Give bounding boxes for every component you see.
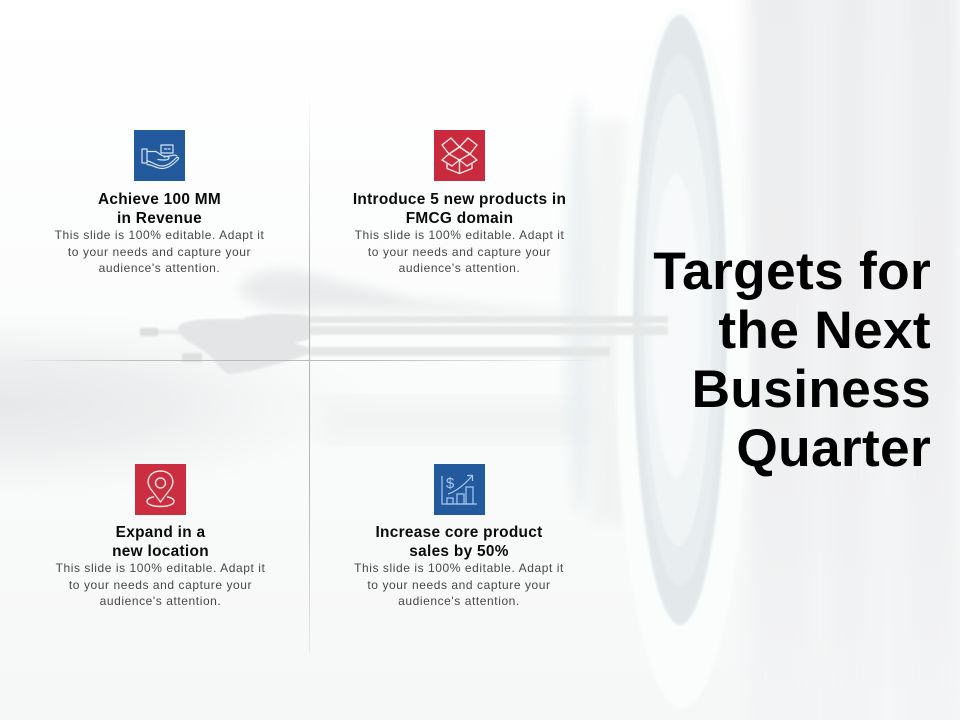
block: new location: This slide is 100% editable. Adapt it <box>56 561 265 575</box>
icon: open box <box>434 130 485 181</box>
title: Targets for <box>653 242 931 301</box>
horizontal divider <box>15 360 605 361</box>
icon: hand holding money <box>134 130 185 181</box>
block: achieve revenue: Achieve 100 MM <box>98 191 221 208</box>
block: new products: FMCG domain <box>406 210 513 227</box>
block: core product sales: Increase core product <box>375 524 543 541</box>
block: new products: to your needs and capture your <box>368 244 551 258</box>
block: new location: audience's attention. <box>100 594 221 608</box>
title: Quarter <box>736 419 931 478</box>
block: core product sales <box>354 524 564 608</box>
block: new products: This slide is 100% editable. Adapt it <box>355 228 564 242</box>
block: achieve revenue: in Revenue <box>117 210 202 227</box>
block: new products: Introduce 5 new products in <box>353 191 566 208</box>
block: core product sales: This slide is 100% editable. Adapt it <box>354 561 564 575</box>
block: core product sales: to your needs and capture your <box>367 578 551 592</box>
block: core product sales: audience's attention. <box>398 594 520 608</box>
right wall <box>748 0 960 720</box>
target rings <box>633 15 727 625</box>
block: achieve revenue: This slide is 100% editable. Adapt it <box>55 228 264 242</box>
block: achieve revenue <box>54 191 264 275</box>
title: the Next <box>718 301 931 360</box>
background target ghost <box>592 120 626 525</box>
block: new products: audience's attention. <box>399 261 520 275</box>
block: new location: to your needs and capture your <box>69 578 252 592</box>
block: achieve revenue: to your needs and capture your <box>68 244 251 258</box>
vertical divider <box>309 95 310 653</box>
arrows <box>140 314 668 374</box>
icon: sales growth chart: $ <box>446 475 455 492</box>
block: new products <box>353 191 566 275</box>
block: achieve revenue: audience's attention. <box>99 261 220 275</box>
bottom-left haze <box>0 300 400 510</box>
target white rim <box>616 8 748 708</box>
block: core product sales: sales by 50% <box>409 543 509 560</box>
icon: location pin <box>135 464 186 515</box>
block: new location: Expand in a <box>116 524 205 541</box>
block: new location: new location <box>112 543 209 560</box>
block: new location <box>56 524 265 608</box>
title <box>653 242 931 478</box>
icon: sales growth chart <box>434 464 485 515</box>
title: Business <box>692 360 931 419</box>
